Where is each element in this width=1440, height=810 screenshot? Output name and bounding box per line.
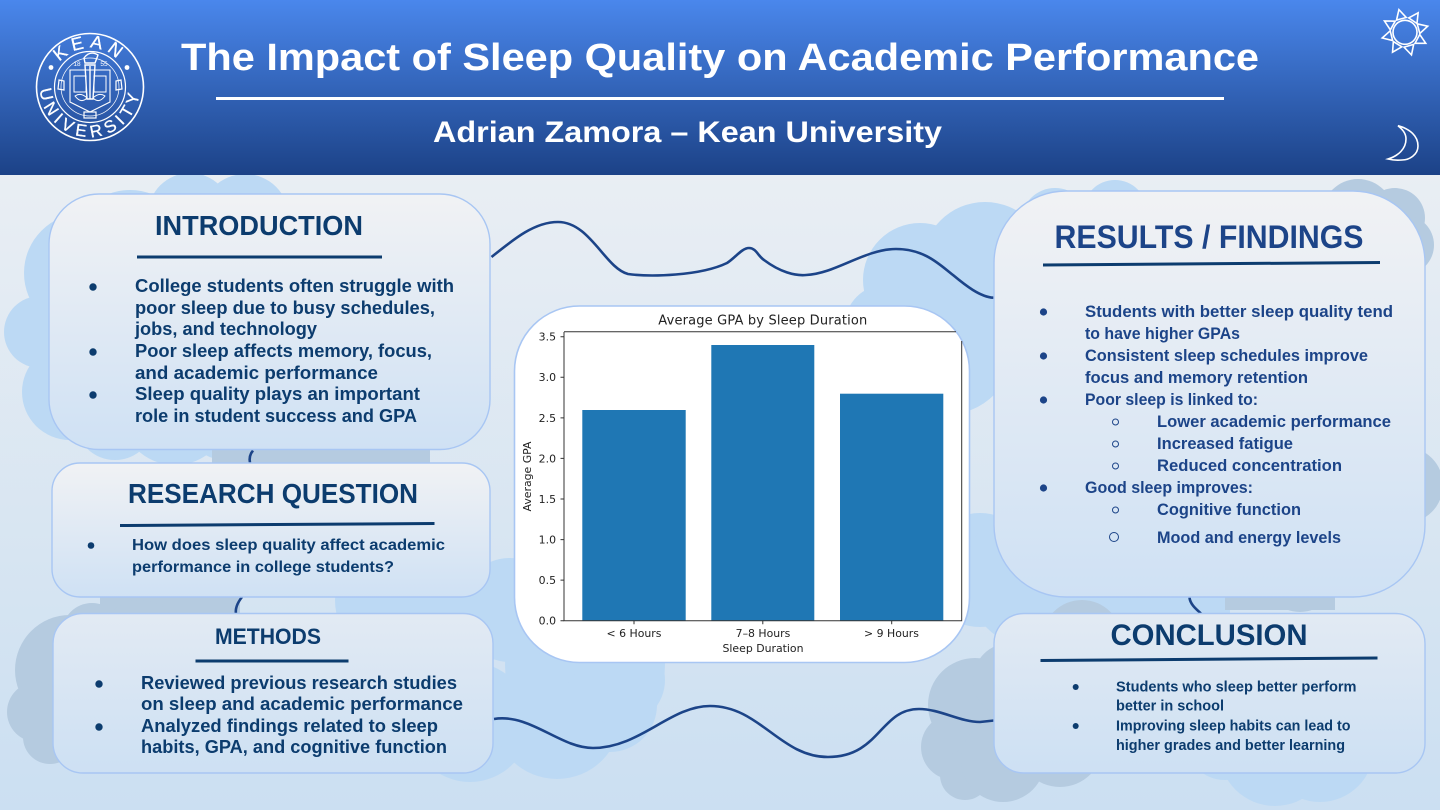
bullet list: results: Lower academic performance [1157, 413, 1391, 431]
icon: Kean University seal: UNIVERSITY [40, 88, 139, 138]
bullet list: research question: performance in college students? [132, 559, 394, 576]
bullet list: methods: on sleep and academic performance [141, 694, 463, 714]
heading underline [120, 524, 434, 526]
connector: intro to research question [250, 450, 253, 463]
connector: results to conclusion [1190, 598, 1201, 614]
y axis tick labels: 3.0 [539, 371, 556, 384]
subtitle: Adrian Zamora – Kean University [433, 116, 942, 149]
heading underline [1043, 262, 1380, 265]
heading underline [1040, 658, 1378, 660]
heading underline [137, 256, 382, 258]
y axis title: Average GPA [521, 441, 534, 511]
panel: results / findings [994, 191, 1425, 597]
bullet list: introduction [89, 276, 454, 426]
axes [564, 332, 962, 621]
panel: research question [52, 463, 490, 597]
bullet list: methods: Analyzed findings related to sleep [141, 716, 438, 736]
clouds: grey blue [7, 179, 1440, 802]
bullet list: conclusion [1073, 680, 1356, 754]
panel: introduction [49, 194, 490, 450]
connector: methods to conclusion [494, 706, 994, 757]
chart title: Average GPA by Sleep Duration [658, 314, 867, 328]
bars [582, 345, 943, 621]
bullet list: research question [88, 537, 445, 576]
heading underline [196, 660, 348, 662]
y axis tick labels: 3.5 [539, 331, 556, 344]
y axis tick labels: 2.0 [539, 452, 556, 465]
y axis tick labels: 2.5 [539, 412, 556, 425]
panel: methods [53, 614, 493, 773]
icon: Kean University seal: 55 [100, 61, 108, 68]
bullet list: results: Mood and energy levels [1157, 529, 1341, 547]
bullet list: introduction: College students often struggle with [135, 276, 454, 296]
x axis tick labels: < 6 Hours [607, 627, 662, 640]
bullet list: introduction: Sleep quality plays an important [135, 384, 420, 404]
bullet list: results: to have higher GPAs [1085, 325, 1240, 343]
bullet list: results: Good sleep improves: [1085, 479, 1253, 497]
y axis tick labels: 0.5 [539, 574, 556, 587]
bullet list: methods [95, 673, 463, 757]
bullet list: introduction: jobs, and technology [134, 319, 317, 339]
x axis title: Sleep Duration [722, 642, 804, 655]
bullet list: conclusion: higher grades and better learning [1116, 738, 1345, 754]
connector: intro to results [492, 222, 994, 298]
panel: conclusion [994, 614, 1425, 773]
bullet list: results: Consistent sleep schedules improve [1085, 347, 1368, 365]
icon: sun [1381, 8, 1429, 56]
connector: research question to methods [236, 597, 242, 614]
bullet list: results: Cognitive function [1157, 501, 1301, 519]
bullet list: introduction: and academic performance [135, 363, 378, 383]
y axis tick labels [539, 331, 556, 628]
x axis tick labels: 7–8 Hours [736, 627, 791, 640]
bullet list: results: Poor sleep is linked to: [1085, 391, 1258, 409]
bullet list: results: Reduced concentration [1157, 457, 1342, 475]
bullet list: results: Increased fatigue [1157, 435, 1293, 453]
bullet list: introduction: Poor sleep affects memory, focus, [135, 341, 432, 361]
bullet list: conclusion: Students who sleep better perform [1116, 680, 1356, 696]
title: The Impact of Sleep Quality on Academic Performance [181, 37, 1259, 79]
bullet list: results [1040, 303, 1393, 547]
bullet list: methods: habits, GPA, and cognitive function [141, 737, 447, 757]
icon: Kean University seal: KEAN [52, 36, 124, 61]
y axis tick labels: 0.0 [539, 614, 556, 628]
bullet list: research question: How does sleep quality affect academic [132, 537, 445, 554]
icon: Kean University seal [36, 32, 144, 142]
bullet list: results: Students with better sleep quality tend [1085, 303, 1393, 321]
heading: introduction: INTRODUCTION [155, 210, 363, 241]
panel: chart card [514, 306, 970, 662]
icon: Kean University seal: 18 [73, 61, 81, 68]
page background [0, 175, 1440, 810]
heading: methods: METHODS [215, 624, 321, 649]
header band [0, 0, 1440, 175]
x axis tick labels [607, 627, 919, 640]
bar chart: average GPA by sleep duration [521, 314, 962, 655]
bullet list: results: focus and memory retention [1085, 369, 1308, 387]
icon: moon [1388, 126, 1418, 160]
bullet list: conclusion: better in school [1116, 698, 1224, 714]
clouds: pale blue [4, 173, 1374, 806]
title underline [216, 97, 1224, 100]
bullet list: conclusion: Improving sleep habits can lead to [1116, 718, 1351, 734]
x axis tick labels: > 9 Hours [864, 627, 919, 640]
bullet list: introduction: role in student success and GPA [135, 406, 417, 426]
heading: results / findings: RESULTS / FINDINGS [1054, 219, 1364, 255]
heading: conclusion: CONCLUSION [1110, 619, 1308, 652]
y axis tick labels: 1.0 [539, 534, 556, 546]
bullet list: introduction: poor sleep due to busy schedules, [135, 298, 435, 318]
bullet list: methods: Reviewed previous research studies [141, 673, 457, 693]
y axis tick labels: 1.5 [539, 493, 556, 506]
heading: research question: RESEARCH QUESTION [128, 478, 418, 509]
